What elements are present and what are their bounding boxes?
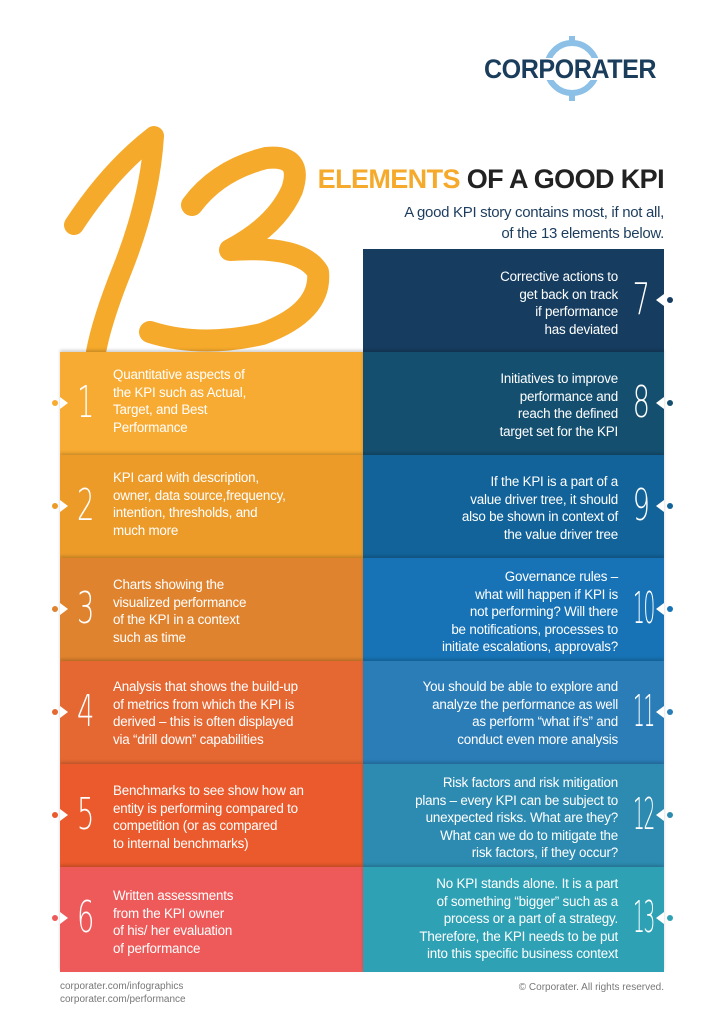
panel 12 — [363, 764, 664, 867]
panel 12: plans – every KPI can be subject to — [415, 792, 618, 808]
panel 4: via “drill down” capabilities — [113, 732, 264, 746]
panel 8: reach the defined — [518, 406, 618, 421]
panel 7: 7 — [633, 274, 650, 325]
panel 11: analyze the performance as well — [432, 696, 618, 712]
panel 10 — [363, 558, 664, 661]
panel 10: what will happen if KPI is — [475, 586, 618, 602]
panel 5 — [60, 764, 363, 867]
panel 2: KPI card with description, — [113, 470, 259, 485]
panel 13: Therefore, the KPI needs to be put — [419, 928, 618, 944]
panel 12: risk factors, if they occur? — [472, 845, 618, 860]
panel 9: value driver tree, it should — [470, 492, 618, 506]
panel 5: competition (or as compared — [113, 818, 277, 833]
panel 8 — [363, 352, 664, 455]
panel 4: of metrics from which the KPI is — [113, 696, 294, 712]
panel 12: Risk factors and risk mitigation — [443, 775, 618, 790]
panel 5: 5 — [77, 789, 94, 840]
footer links — [60, 981, 186, 1005]
panel 1: Performance — [113, 420, 187, 434]
panel 9: 9 — [633, 480, 650, 531]
panel 6: 6 — [77, 892, 94, 943]
panel 1: Quantitative aspects of — [113, 367, 245, 382]
panel 5: entity is performing compared to — [113, 800, 298, 816]
panel 12: 12 — [633, 789, 654, 840]
panel 8: Initiatives to improve — [500, 371, 618, 386]
panel 3: visualized performance — [113, 594, 246, 610]
panel 7 — [363, 249, 664, 352]
panel 8: 8 — [633, 377, 650, 428]
panel 13: 13 — [633, 892, 654, 943]
panel 7: has deviated — [544, 322, 618, 336]
panel 13 — [363, 867, 664, 972]
panel 13: of something “bigger” such as a — [437, 894, 618, 908]
panel 6: Written assessments — [113, 888, 233, 903]
panel 10: initiate escalations, approvals? — [442, 639, 618, 654]
panel 11: as perform “what if’s” and — [472, 714, 618, 729]
subtitle — [404, 204, 664, 242]
panel 9 — [363, 455, 664, 558]
panel 2: much more — [113, 522, 178, 538]
panel 11 — [363, 661, 664, 764]
panel 11: 11 — [633, 686, 654, 737]
panel 4: 4 — [77, 686, 94, 737]
big brush 13 — [64, 126, 330, 352]
panel 10: Governance rules – — [505, 569, 618, 584]
panel 7: if performance — [535, 304, 618, 319]
panel 7: Corrective actions to — [500, 269, 618, 284]
panel 11: You should be able to explore and — [423, 679, 618, 694]
panel 6: of performance — [113, 940, 200, 956]
logo — [484, 36, 656, 101]
panel 3: 3 — [77, 583, 94, 634]
panel 6: of his/ her evaluation — [113, 923, 232, 938]
panel 10: be notifications, processes to — [451, 622, 618, 636]
panel 13: No KPI stands alone. It is a part — [436, 876, 618, 891]
panel 1: 1 — [77, 377, 94, 428]
subtitle: A good KPI story contains most, if not all, — [404, 204, 664, 221]
panel 3: of the KPI in a context — [113, 612, 239, 627]
panel 10: not performing? Will there — [470, 604, 618, 619]
panel 2 — [60, 455, 363, 558]
panel 2: 2 — [77, 480, 94, 531]
panel 4 — [60, 661, 363, 764]
panel 2: owner, data source,frequency, — [113, 488, 286, 502]
panel 9: also be shown in context of — [462, 509, 618, 524]
panel 1: Target, and Best — [113, 402, 207, 417]
panel 6 — [60, 867, 363, 972]
panel 7: get back on track — [519, 286, 618, 302]
panel 11: conduct even more analysis — [457, 732, 618, 746]
copyright: © Corporater. All rights reserved. — [519, 982, 664, 993]
panel 9: If the KPI is a part of a — [490, 474, 618, 489]
subtitle: of the 13 elements below. — [501, 225, 664, 242]
logo: CORPORATER — [484, 54, 656, 84]
panel 5: to internal benchmarks) — [113, 836, 248, 850]
panel 3: such as time — [113, 630, 186, 644]
panel 1 — [60, 352, 363, 455]
panel 4: Analysis that shows the build-up — [113, 679, 298, 694]
panel 3: Charts showing the — [113, 577, 224, 592]
panel 2: intention, thresholds, and — [113, 505, 257, 520]
panel 12: unexpected risks. What are they? — [426, 810, 618, 825]
panel 6: from the KPI owner — [113, 906, 224, 920]
footer links: corporater.com/infographics — [60, 981, 183, 992]
footer links: corporater.com/performance — [60, 994, 186, 1005]
title: ELEMENTS OF A GOOD KPI — [318, 164, 664, 194]
panel 10: 10 — [633, 583, 654, 634]
panel 5: Benchmarks to see show how an — [113, 783, 304, 798]
panel 4: derived – this is often displayed — [113, 714, 293, 729]
panel 8: performance and — [520, 388, 618, 404]
panel 1: the KPI such as Actual, — [113, 384, 246, 400]
panel 12: What can we do to mitigate the — [440, 828, 618, 842]
panel 13: into this specific business context — [427, 946, 618, 961]
panel 8: target set for the KPI — [500, 424, 618, 438]
panel 13: process or a part of a strategy. — [444, 911, 618, 926]
panel 9: the value driver tree — [504, 526, 618, 542]
panel 3 — [60, 558, 363, 661]
